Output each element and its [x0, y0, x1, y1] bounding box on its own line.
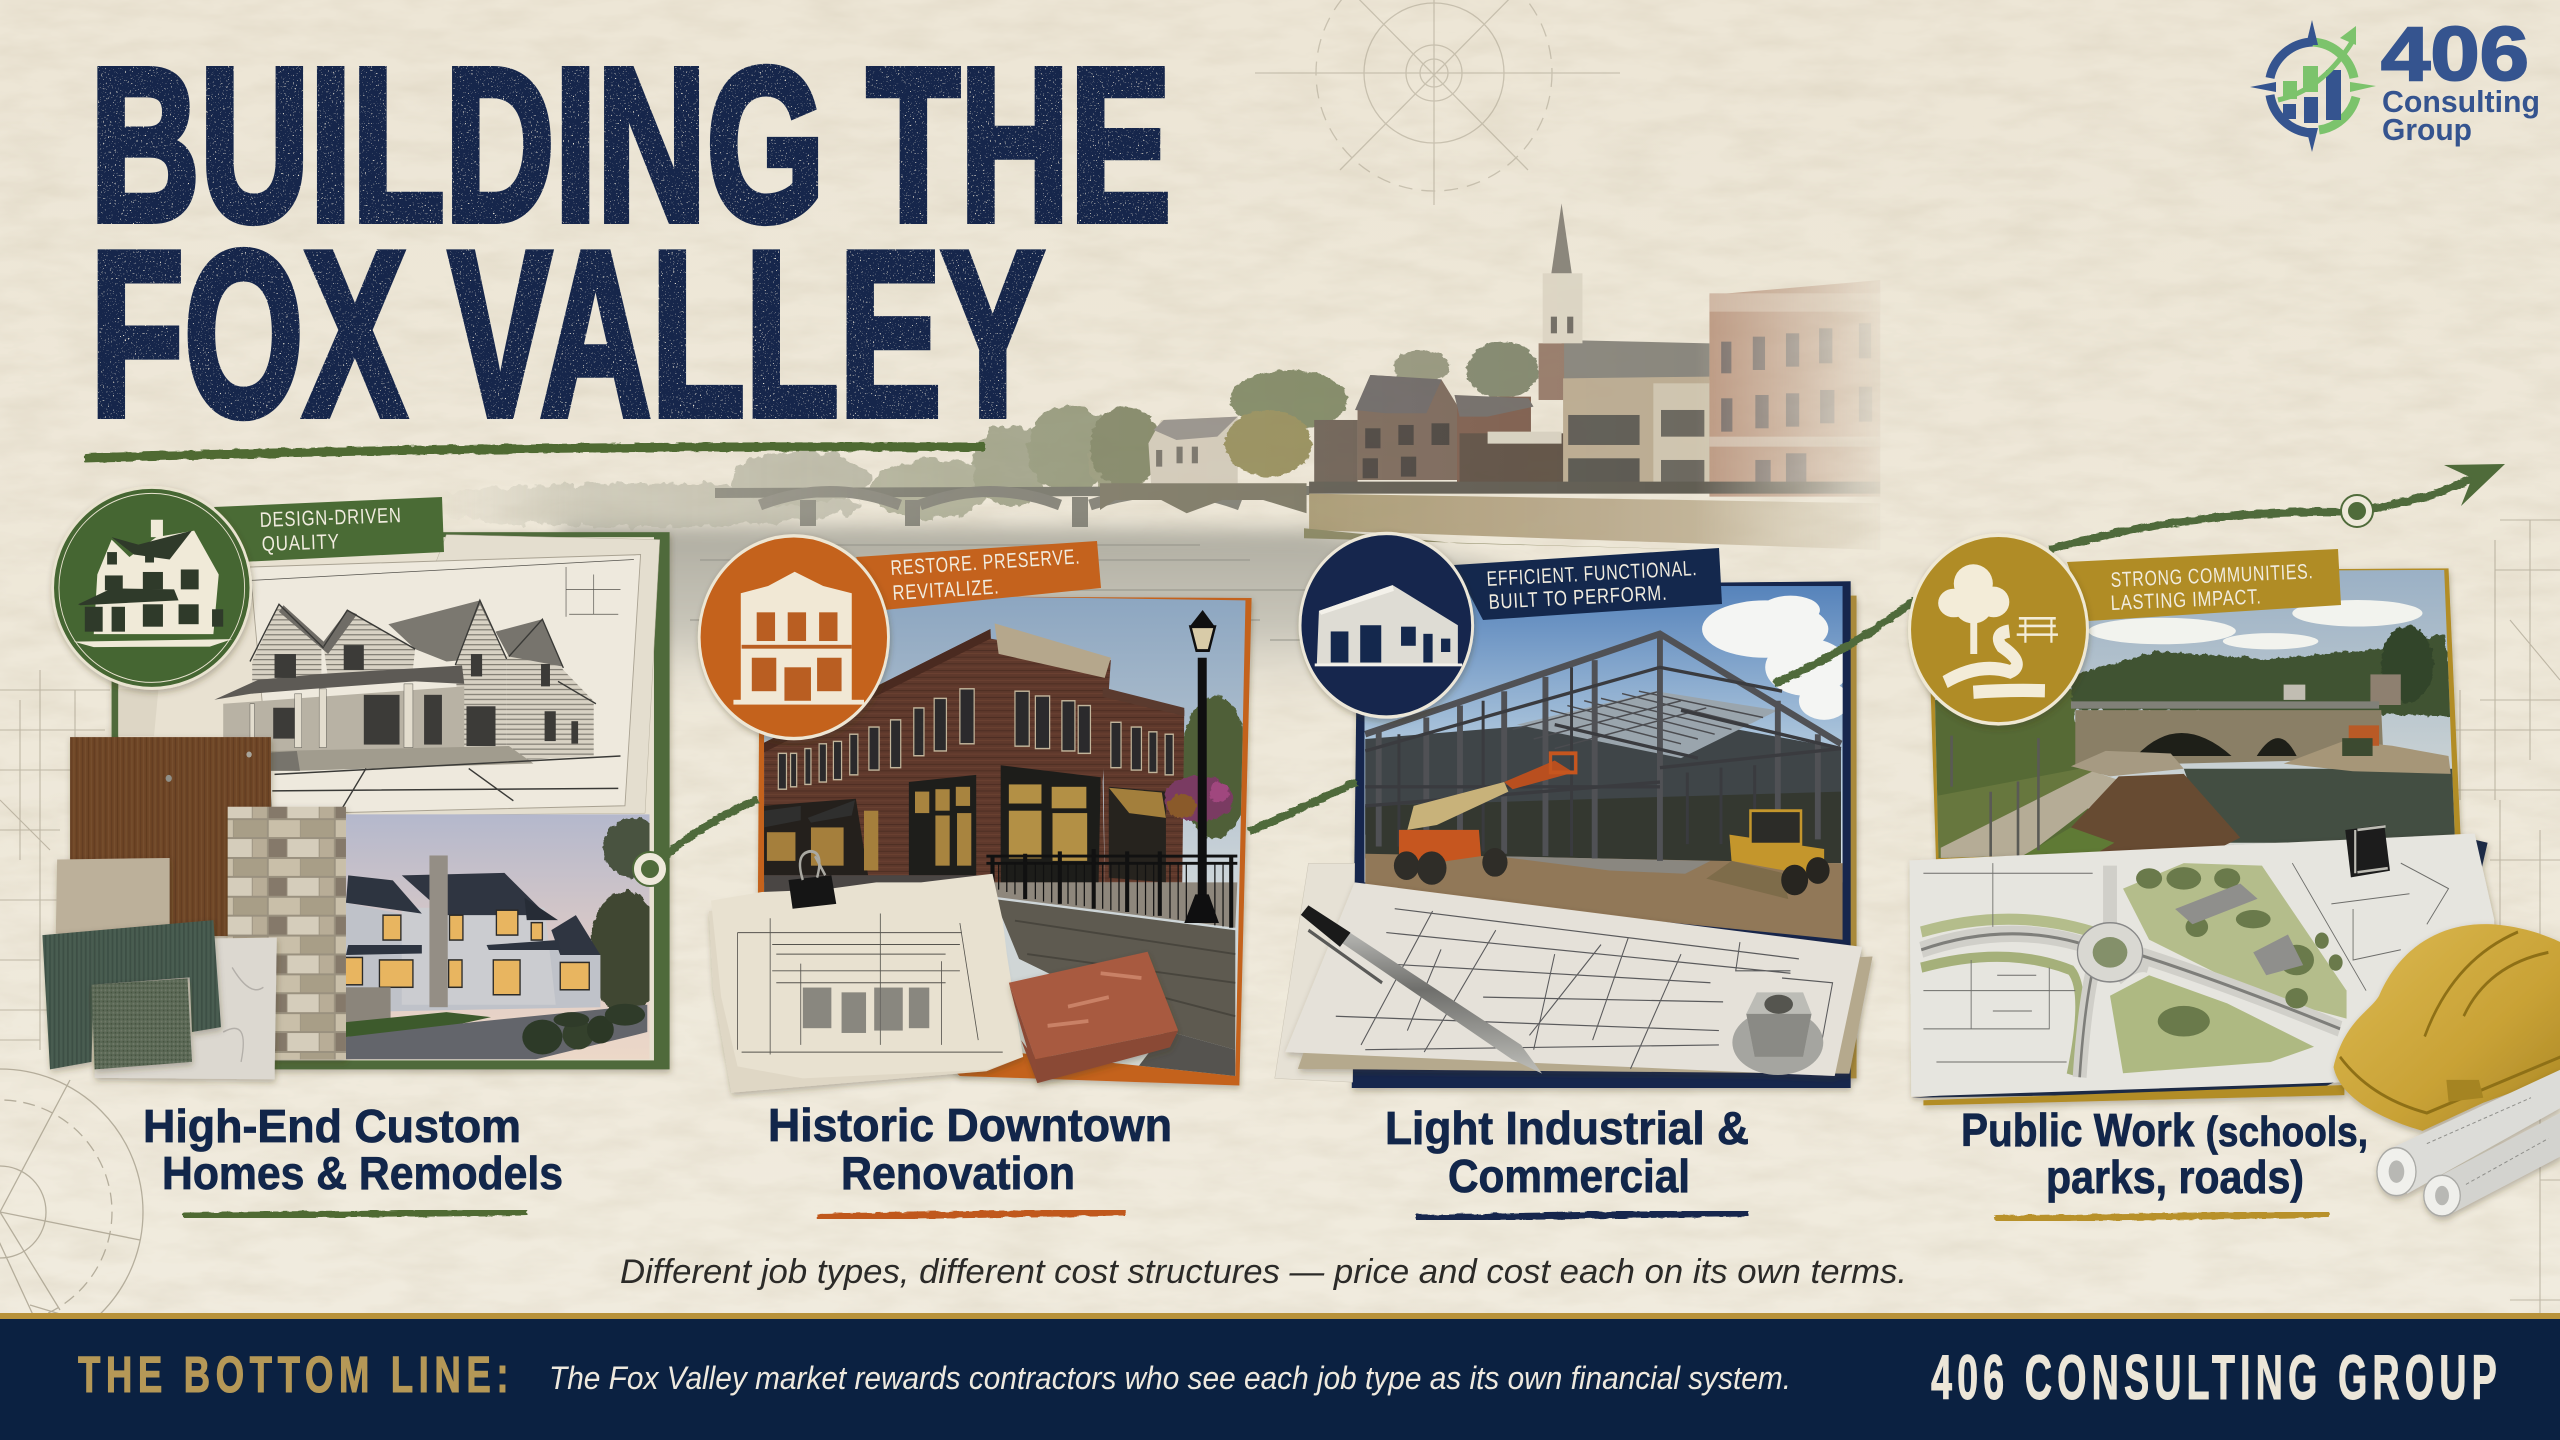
card title: public work	[1961, 1104, 2368, 1203]
card title: industrial	[1385, 1102, 1749, 1202]
underline: homes	[183, 1212, 527, 1216]
arrow node and head	[2341, 464, 2505, 527]
logo: 406 Consulting Group: Consulting	[2382, 84, 2540, 119]
caption: different job types: Different job types, different cost structures — price and cost each on its own terms.	[620, 1253, 1907, 1291]
collage: frame, bridge photo, site plan, hard hat and rolls	[1910, 567, 2560, 1216]
blueprint linework: left margin	[0, 670, 110, 1050]
card title: industrial: Commercial	[1448, 1150, 1690, 1202]
river water	[560, 525, 1520, 715]
steel frame construction photo	[1364, 586, 1849, 940]
material swatches	[42, 737, 346, 1079]
card title: downtown	[768, 1099, 1172, 1199]
badge: historic building icon	[699, 536, 888, 739]
ribbon: efficient functional: EFFICIENT. FUNCTIONAL.	[1486, 557, 1698, 591]
binder clip	[789, 851, 836, 909]
title underline brush stroke	[85, 447, 985, 458]
boom lift	[1394, 753, 1576, 885]
hard hat	[2334, 924, 2560, 1131]
collage: frame, photo, sketch and brick	[709, 591, 1252, 1093]
house at dusk photo	[345, 814, 665, 1059]
ribbon: strong communities	[2067, 549, 2341, 621]
card title: downtown: Renovation	[841, 1147, 1075, 1199]
footer statement: The Fox Valley market rewards contractors who see each job type as its own financial system.	[549, 1360, 1791, 1396]
card title: industrial: Light Industrial &	[1385, 1102, 1749, 1154]
footer brand: 406 CONSULTING GROUP	[1931, 1343, 2497, 1414]
ribbon: design-driven quality: QUALITY	[261, 530, 340, 556]
blueprint sheet	[1285, 882, 1873, 1076]
panel: historic downtown renovation	[699, 536, 1252, 1217]
panel: public work	[1910, 535, 2560, 1219]
old brick	[1009, 952, 1178, 1083]
panel: light industrial and commercial	[1275, 533, 1873, 1218]
ribbon: design-driven quality: DESIGN-DRIVEN	[259, 504, 402, 532]
compass ornament: top centre	[1255, 0, 1620, 205]
bulldog clip	[2345, 825, 2390, 877]
title: Building the Fox Valley: FOX VALLEY	[90, 202, 1044, 465]
underline: downtown	[817, 1212, 1125, 1217]
logo: 406 Consulting Group: 406	[2381, 12, 2529, 97]
card title: public work: Public Work (schools,	[1961, 1104, 2368, 1156]
ribbon: strong communities: LASTING IMPACT.	[2110, 585, 2262, 615]
panel frame	[1927, 568, 2462, 873]
underline: public work	[1995, 1214, 2329, 1219]
underline: industrial	[1416, 1213, 1748, 1218]
pen	[1301, 905, 1542, 1074]
collage: frame, construction photo, blueprints, pen and nut	[1275, 581, 1873, 1088]
rear drawing sheet	[1275, 863, 1355, 1082]
stacked paper with house sketch	[118, 535, 660, 816]
ribbon: restore preserve revitalize: REVITALIZE.	[892, 576, 1000, 605]
compass ornament: bottom left	[0, 1069, 143, 1355]
arrow node: panel 1	[633, 852, 667, 886]
card title: homes: Homes & Remodels	[162, 1147, 563, 1199]
card title: public work: parks, roads)	[2046, 1151, 2304, 1203]
logo: 406 Consulting Group: Group	[2382, 112, 2472, 147]
title: Building the Fox Valley: BUILDING THE	[90, 24, 1171, 267]
wheel loader	[1706, 811, 1830, 899]
footer band: the bottom line	[0, 1313, 2560, 1440]
panel: high-end custom homes	[42, 487, 670, 1216]
ribbon: efficient functional: BUILT TO PERFORM.	[1488, 582, 1668, 614]
panel frame	[758, 596, 1252, 1086]
badge: house icon	[53, 487, 251, 688]
card title: homes	[143, 1100, 563, 1199]
ribbon: design-driven quality	[214, 497, 444, 562]
panel frame	[1352, 581, 1857, 1088]
ribbon: efficient functional	[1454, 548, 1722, 620]
card title: downtown: Historic Downtown	[768, 1099, 1172, 1151]
badge: park icon	[1910, 535, 2087, 724]
logo: 406 Consulting Group	[2250, 12, 2540, 152]
panel frame	[112, 532, 670, 1069]
ribbon: strong communities: STRONG COMMUNITIES.	[2110, 560, 2314, 592]
card title: homes: High-End Custom	[143, 1100, 521, 1152]
site plan sheet	[1910, 834, 2494, 1105]
torn paper with storefront sketch	[709, 874, 1023, 1093]
ribbon: restore preserve revitalize	[856, 541, 1101, 610]
historic main street photo	[762, 591, 1250, 1078]
scene: Fox River at top of cards	[478, 204, 1880, 676]
badge: warehouse icon	[1300, 533, 1473, 717]
rolled plans	[2377, 1070, 2560, 1216]
arrow: progress path across cards	[662, 475, 2480, 858]
footer heading: THE BOTTOM LINE:	[78, 1347, 509, 1403]
blueprint linework: right margin	[2440, 520, 2560, 1440]
ribbon: restore preserve revitalize: RESTORE. PRESERVE.	[890, 545, 1081, 580]
hex nut on washer	[1732, 992, 1823, 1075]
riverside town view	[420, 203, 1880, 550]
collage: frame, sketch, swatches and photo	[42, 532, 670, 1079]
logo mark: compass and rising bars	[2250, 20, 2376, 152]
bridge and riverfront photo	[1928, 567, 2462, 863]
title: Building the Fox Valley	[90, 24, 1171, 465]
